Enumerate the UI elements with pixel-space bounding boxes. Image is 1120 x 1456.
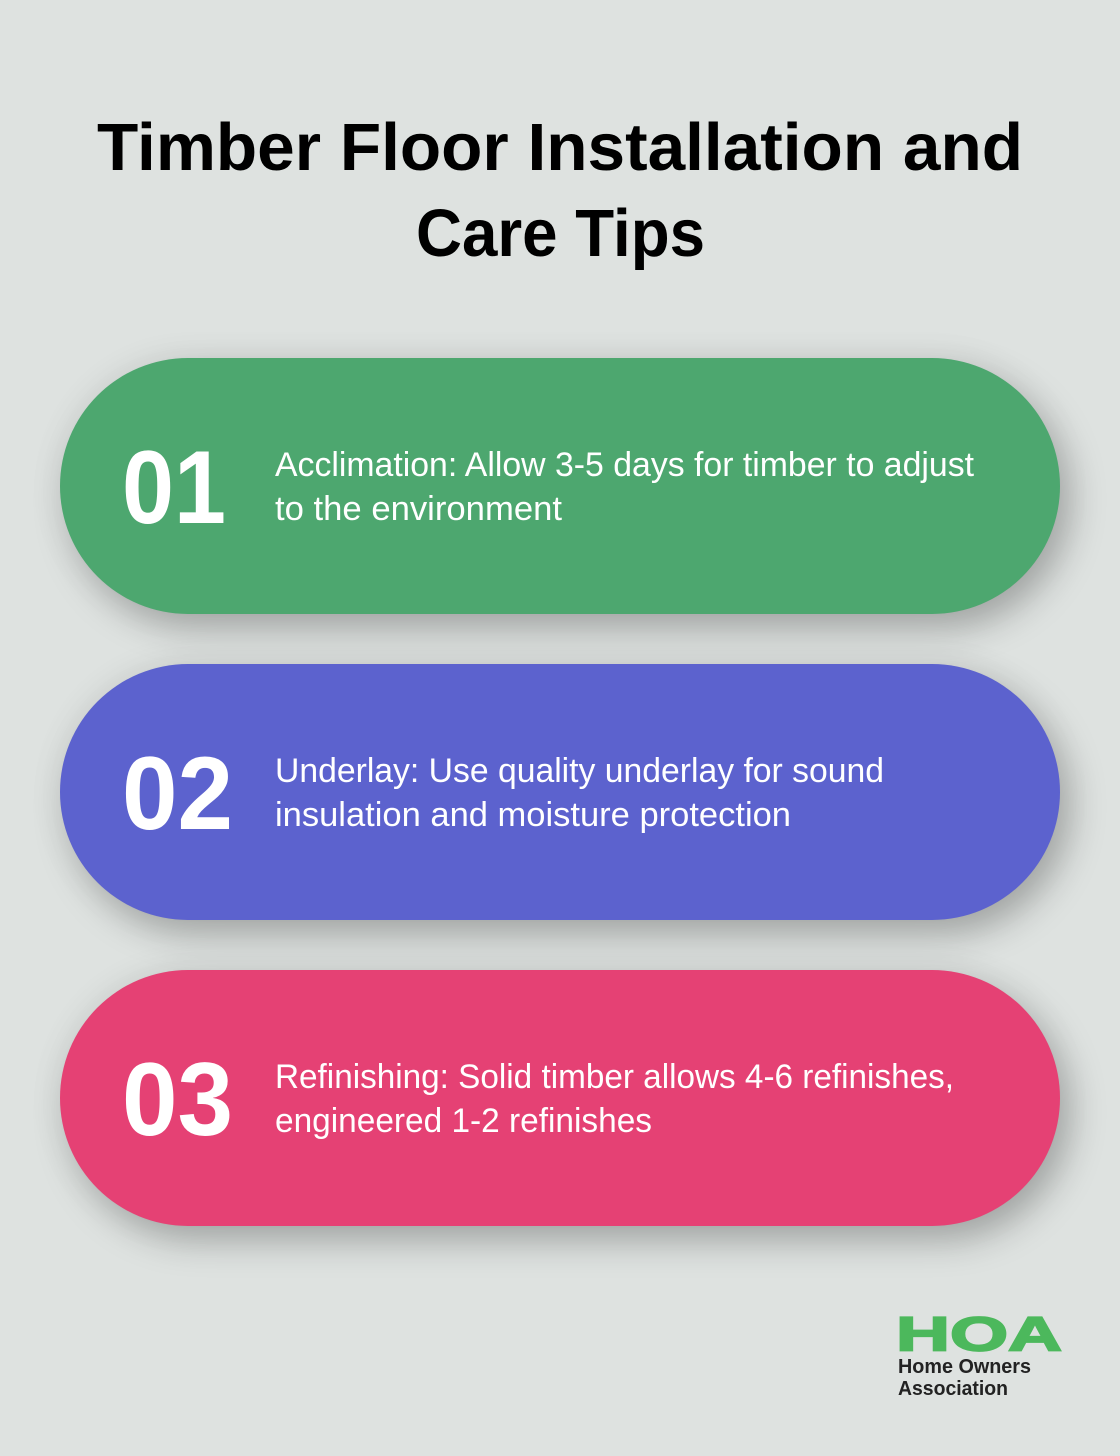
title xyxy=(97,110,1023,271)
text: underlay tip xyxy=(275,752,884,834)
logo name xyxy=(898,1356,1031,1400)
text: refinishing tip xyxy=(275,1058,954,1140)
title: Timber Floor Installation and xyxy=(97,110,1023,185)
number 03: 03 xyxy=(122,1042,233,1158)
logo: Home Owners Association xyxy=(896,1308,1062,1400)
panel: step 02 underlay xyxy=(60,664,1060,920)
text: refinishing tip: engineered 1-2 refinishes xyxy=(275,1102,652,1140)
logo name: Home Owners xyxy=(898,1356,1031,1378)
panel: step 03 refinishing xyxy=(60,970,1060,1226)
text: acclimation tip xyxy=(275,446,975,528)
panel: step 01 acclimation xyxy=(60,358,1060,614)
text: refinishing tip: Refinishing: Solid timber allows 4-6 refinishes, xyxy=(275,1058,954,1096)
number 01: 01 xyxy=(122,430,226,546)
logo mark HOA: HOA xyxy=(896,1308,1062,1362)
text: acclimation tip: Acclimation: Allow 3-5 days for timber to adjust xyxy=(275,446,975,484)
text: underlay tip: insulation and moisture protection xyxy=(275,796,791,834)
text: acclimation tip: to the environment xyxy=(275,490,563,528)
text: underlay tip: Underlay: Use quality underlay for sound xyxy=(275,752,884,790)
logo name: Association xyxy=(898,1378,1008,1400)
title: Care Tips xyxy=(416,196,705,271)
number 02: 02 xyxy=(122,736,233,852)
